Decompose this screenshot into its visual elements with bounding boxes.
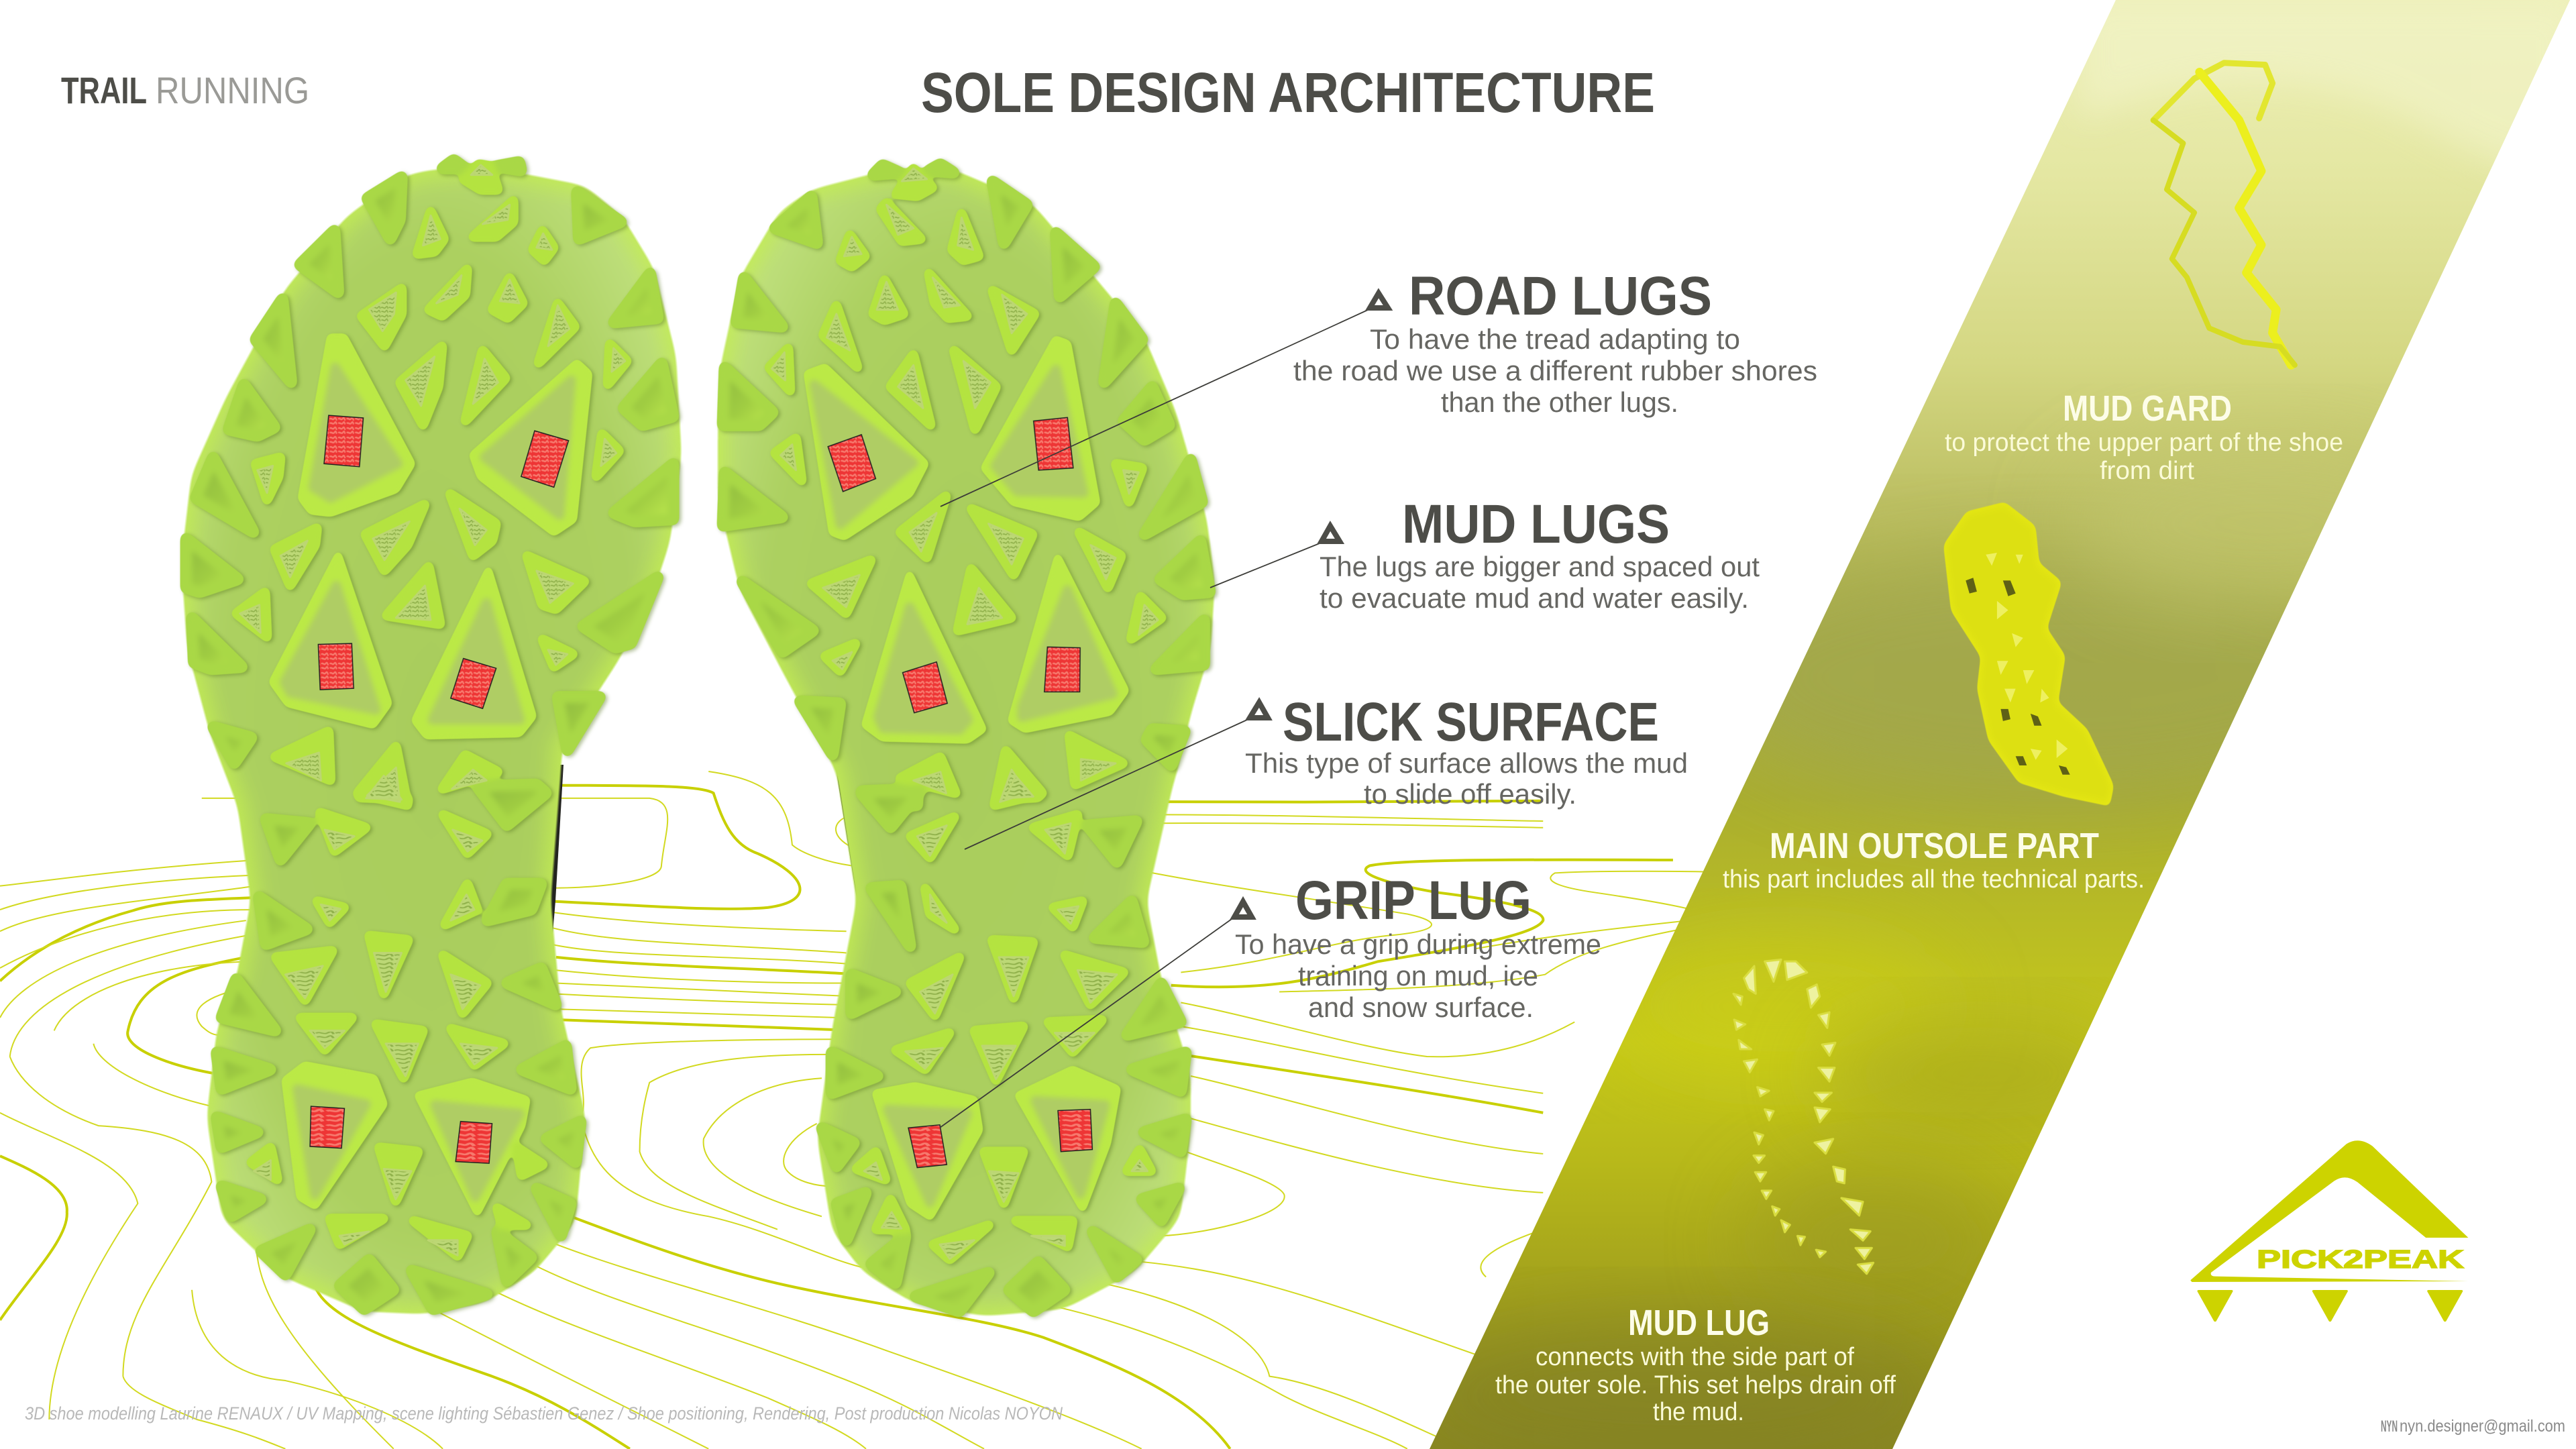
leader lines bbox=[940, 310, 1368, 1128]
caption: main outsole part: this part includes all the technical parts. bbox=[1723, 865, 2145, 894]
text: road lugs description: than the other lugs. bbox=[1441, 386, 1678, 418]
text: slick surface description: This type of surface allows the mud bbox=[1245, 747, 1688, 779]
logo wordmark: PICK2PEAK bbox=[2257, 1246, 2465, 1274]
caption: mud lug: connects with the side part of bbox=[1536, 1343, 1854, 1371]
text: road lugs description: To have the tread adapting to bbox=[1370, 323, 1740, 355]
caption: mud lug: the outer sole. This set helps drain off bbox=[1495, 1371, 1896, 1399]
callout: road lugs bbox=[1293, 266, 1817, 418]
caption: mud gard: from dirt bbox=[2100, 457, 2194, 485]
heading: mud lugs: MUD LUGS bbox=[1402, 494, 1670, 555]
logo: pick2peak bbox=[2190, 1140, 2468, 1320]
brand heading: trail: TRAIL bbox=[61, 69, 147, 111]
text: road lugs description: the road we use a different rubber shores bbox=[1293, 355, 1817, 386]
left rearfoot textures and red road lugs bbox=[254, 775, 497, 1255]
left forefoot textures and red road lugs bbox=[240, 165, 625, 802]
text: mud lugs description: The lugs are bigger and spaced out bbox=[1320, 551, 1760, 582]
text: grip lug description bbox=[1235, 928, 1601, 1023]
left sole body bbox=[186, 170, 677, 1309]
component: mud lug set bbox=[1733, 959, 1874, 1274]
right rearfoot textures and red road lugs bbox=[864, 775, 1148, 1258]
text: mud lugs description: to evacuate mud and water easily. bbox=[1320, 582, 1749, 614]
right forefoot lug solids bbox=[722, 164, 1210, 805]
text: slick surface description bbox=[1245, 747, 1688, 810]
caption: mud gard bbox=[1945, 388, 2343, 485]
caption: mud lug: the mud. bbox=[1653, 1398, 1744, 1426]
right forefoot textures and red road lugs bbox=[771, 168, 1158, 802]
right lug solids bbox=[722, 164, 1210, 1311]
text: road lugs description bbox=[1293, 323, 1817, 418]
left sole midfoot shadow bbox=[542, 765, 564, 1006]
left lug solids bbox=[186, 160, 674, 1309]
panel: diagonal landscape band bbox=[1395, 0, 2576, 1449]
marker: road lugs bbox=[1370, 293, 1388, 308]
callout: grip lug bbox=[1234, 870, 1601, 1023]
right sole body bbox=[722, 172, 1210, 1311]
contact email: NYN bbox=[2381, 1417, 2398, 1436]
heading: road lugs: ROAD LUGS bbox=[1409, 266, 1712, 327]
text: grip lug description: To have a grip during extreme bbox=[1235, 928, 1601, 960]
logo spikes bbox=[2199, 1291, 2461, 1320]
callout: mud lugs bbox=[1320, 494, 1760, 614]
right sole midfoot shadow bbox=[835, 765, 865, 1006]
credits: 3D shoe modelling Laurine RENAUX / UV Mapping, scene lighting Sébastien Genez / Shoe positioning, Rendering, Post production Nicolas NOYON bbox=[25, 1403, 1063, 1424]
text: mud lugs description bbox=[1320, 551, 1760, 614]
text: grip lug description: training on mud, ice bbox=[1298, 960, 1538, 991]
marker: mud lugs bbox=[1322, 526, 1340, 541]
caption: main outsole part: MAIN OUTSOLE PART bbox=[1770, 826, 2099, 866]
brand heading: running: RUNNING bbox=[156, 69, 309, 111]
contact email bbox=[2381, 1417, 2565, 1436]
title: SOLE DESIGN ARCHITECTURE bbox=[921, 61, 1655, 124]
marker: slick surface bbox=[1250, 702, 1268, 718]
caption: main outsole part bbox=[1723, 826, 2145, 894]
heading: slick surface: SLICK SURFACE bbox=[1283, 692, 1659, 753]
caption: mud lug: MUD LUG bbox=[1628, 1303, 1770, 1343]
left sole bbox=[186, 160, 677, 1309]
caption: mud lug bbox=[1495, 1303, 1896, 1426]
component: mud guard bbox=[2153, 63, 2295, 365]
callout: slick surface bbox=[1245, 692, 1688, 810]
logo mountain mark bbox=[2190, 1140, 2468, 1282]
right sole bbox=[722, 164, 1210, 1311]
left rearfoot lug solids bbox=[217, 771, 581, 1309]
caption: mud gard: MUD GARD bbox=[2063, 388, 2232, 429]
marker: grip lug bbox=[1234, 902, 1252, 917]
right rearfoot lug solids bbox=[822, 771, 1186, 1311]
caption: mud gard: to protect the upper part of the shoe bbox=[1945, 429, 2343, 457]
left forefoot lug solids bbox=[186, 160, 674, 805]
topographic contour lines bbox=[0, 771, 1772, 1449]
text: slick surface description: to slide off easily. bbox=[1364, 778, 1576, 810]
heading: grip lug: GRIP LUG bbox=[1295, 870, 1532, 931]
component: main outsole part bbox=[1945, 504, 2112, 804]
text: grip lug description: and snow surface. bbox=[1308, 991, 1534, 1023]
